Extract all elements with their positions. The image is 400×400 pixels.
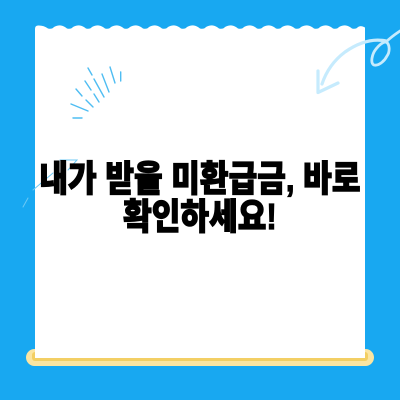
title line 2: 확인하세요! bbox=[123, 196, 277, 237]
icon: sparkle lines bbox=[71, 67, 121, 118]
small dashes behind heading bbox=[23, 160, 77, 207]
scroll roller: bottom bar bbox=[26, 349, 374, 366]
white card with wavy top bbox=[35, 25, 365, 358]
arrow: curly arrow bbox=[318, 31, 400, 92]
title line 1: 내가 받을 미환급금, 바로 bbox=[39, 158, 360, 198]
